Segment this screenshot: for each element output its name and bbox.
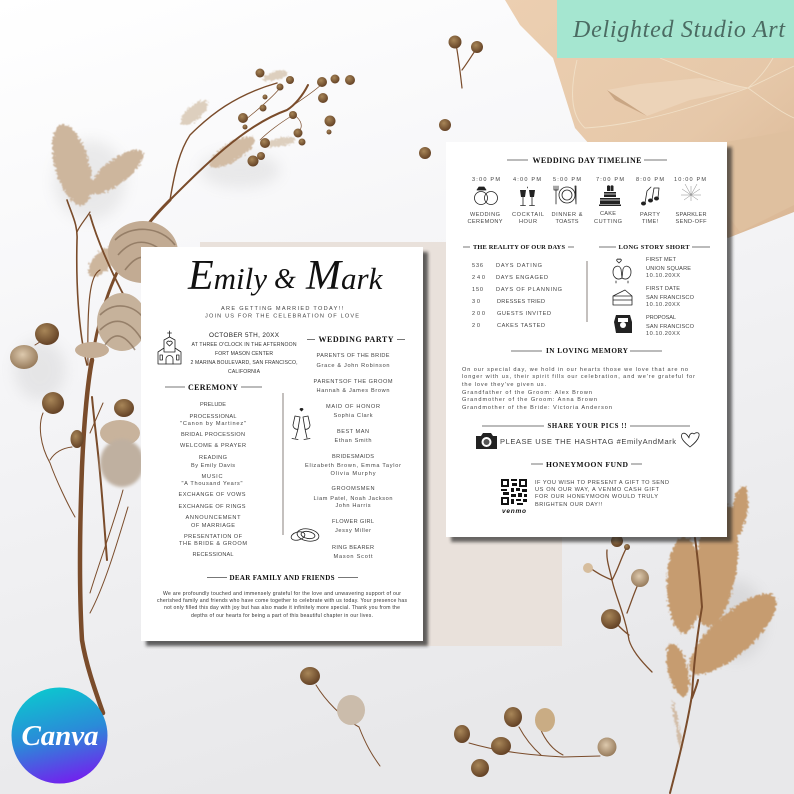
QR code with venmo label	[501, 479, 527, 515]
timeline labels: SEND-OFF	[676, 219, 707, 225]
timeline labels: CEREMONY	[468, 219, 503, 225]
honeymoon text: BRIGHTEN OUR DAY!!	[535, 502, 602, 508]
timeline labels: CAKE	[600, 211, 616, 217]
stats list: 536	[472, 263, 483, 269]
pinecones	[75, 221, 178, 358]
heading: the reality of our days: THE REALITY OF OUR DAYS	[473, 244, 565, 251]
icon: love birds	[613, 259, 631, 283]
banner: studio name: Delighted Studio Art	[572, 17, 786, 43]
QR code with venmo label: venmo	[502, 508, 526, 515]
honeymoon text: US ON OUR WAY, A VENMO CASH GIFT	[535, 487, 660, 493]
event details: AT THREE O'CLOCK IN THE AFTERNOON	[192, 342, 297, 348]
title: couple names: &	[274, 264, 296, 295]
icon: wedding rings	[290, 527, 320, 543]
dried plant: top left stems and plumes	[14, 69, 322, 713]
wedding party list: PARENTSOF THE GROOM	[314, 379, 393, 385]
bud twig, bottom centre	[300, 667, 380, 766]
event details: CALIFORNIA	[228, 369, 261, 375]
heading: long story short: LONG STORY SHORT	[618, 244, 690, 251]
ceremony order list: By Emily Davis	[191, 463, 235, 469]
ceremony order list: WELCOME & PRAYER	[180, 443, 246, 449]
card shadow: left	[146, 252, 428, 646]
timeline times	[472, 177, 706, 183]
honeymoon text	[535, 480, 669, 508]
closing message: not only filled this day with joy but has also made it infinitely more special. Thank you from the	[164, 605, 400, 611]
closing message: depths of our hearts for being a part of this beautiful chapter in our lives.	[191, 613, 373, 619]
icon: camera	[476, 433, 497, 449]
event details: OCTOBER 5TH, 20XX	[209, 332, 280, 339]
ceremony order list: "Canon by Martinez"	[180, 421, 246, 427]
beige backing paper	[200, 242, 562, 646]
heading: ceremony	[165, 383, 262, 392]
ceremony order list: EXCHANGE OF RINGS	[178, 504, 246, 510]
timeline times: 8:00 PM	[636, 177, 664, 183]
icon: hearts	[681, 433, 699, 447]
title: couple names	[187, 253, 384, 299]
timeline labels: HOUR	[519, 219, 537, 225]
ceremony order list: MUSIC	[202, 474, 222, 480]
timeline labels: WEDDING	[470, 212, 500, 218]
wedding party list: Hannah & James Brown	[316, 388, 390, 394]
icon: champagne flutes	[292, 408, 310, 440]
wedding party list: GROOMSMEN	[332, 486, 374, 492]
heading: dear family and friends: DEAR FAMILY AND FRIENDS	[230, 574, 335, 582]
stats list: 240	[472, 275, 485, 281]
icon: wedding cake	[599, 185, 621, 206]
banner: studio name	[557, 0, 794, 58]
invitation line: JOIN US FOR THE CELEBRATION OF LOVE	[205, 314, 359, 320]
wedding party list: RING BEARER	[332, 545, 374, 551]
stats list: 150	[472, 287, 483, 293]
berry twig, bottom right	[454, 707, 616, 777]
stats list: CAKES TASTED	[497, 323, 545, 329]
timeline times: 5:00 PM	[553, 177, 581, 183]
event details: FORT MASON CENTER	[215, 351, 273, 357]
story milestones	[646, 257, 695, 337]
badge: Canva logo	[12, 688, 108, 784]
icon: sparkler	[681, 184, 701, 201]
wedding party list: Elizabeth Brown, Emma Taylor	[305, 463, 401, 469]
timeline times: 3:00 PM	[472, 177, 500, 183]
memorial text: On our special day, we hold in our hearts those we love that are no	[462, 367, 688, 373]
wedding party list: Mason Scott	[334, 554, 373, 560]
honeymoon text: IF YOU WISH TO PRESENT A GIFT TO SEND	[535, 480, 669, 486]
ceremony order list: PRELUDE	[200, 402, 226, 408]
wedding party list: Ethan Smith	[334, 438, 372, 444]
closing message	[157, 591, 407, 619]
icon: dinner plate	[554, 186, 576, 204]
timeline labels: DINNER &	[552, 212, 583, 218]
timeline times: 4:00 PM	[513, 177, 541, 183]
icon: cocktail glasses	[520, 187, 535, 206]
memorial text: longer with us, their spirit fills our celebration, and we're grateful for	[462, 374, 695, 380]
icon: music notes	[641, 187, 659, 206]
memorial text: Grandfather of the Groom: Alex Brown	[462, 390, 592, 396]
ceremony order list: PRESENTATION OF	[184, 534, 243, 540]
wedding party list: MAID OF HONOR	[326, 404, 380, 410]
invitation line: ARE GETTING MARRIED TODAY!!	[221, 306, 343, 312]
kraft envelope with twine	[505, 0, 794, 238]
ceremony order list: THE BRIDE & GROOM	[179, 541, 247, 547]
icon: ring box	[614, 315, 632, 333]
heading: long story short	[599, 244, 710, 251]
stats list: 200	[472, 311, 485, 317]
dried plant: right plumes	[662, 485, 788, 793]
memorial text: the love they've given us.	[462, 382, 546, 388]
ceremony order list: OF MARRIAGE	[191, 523, 235, 529]
event details: 2 MARINA BOULEVARD, SAN FRANCISCO,	[190, 360, 298, 366]
wedding party list: Sophia Clark	[334, 413, 373, 419]
story milestones: SAN FRANCISCO	[646, 324, 695, 330]
timeline times: 10:00 PM	[674, 177, 706, 183]
divider: right card	[586, 261, 588, 322]
closing message: We are profoundly touched and immensely grateful for the love and unwavering support of our	[163, 591, 401, 597]
wedding party list: Grace & John Robinson	[316, 363, 390, 369]
ceremony order list: EXCHANGE OF VOWS	[178, 492, 246, 498]
timeline labels: COCKTAIL	[512, 212, 544, 218]
wedding party list: Olivia Murphy	[330, 471, 376, 477]
wedding party list: Jessy Miller	[335, 528, 371, 534]
ceremony order list: READING	[199, 455, 227, 461]
wedding party list: John Harris	[336, 503, 371, 509]
story milestones: 10.10.20XX	[646, 273, 680, 279]
memorial text: Grandmother of the Bride: Victoria Anderson	[462, 405, 612, 411]
timeline labels: TIME!	[642, 219, 658, 225]
panel: left card, wedding program	[141, 247, 423, 641]
wedding party list: Liam Patel, Noah Jackson	[314, 496, 392, 502]
icon: engagement rings	[474, 187, 498, 204]
heading: honeymoon fund: HONEYMOON FUND	[546, 460, 629, 469]
stats list: DAYS ENGAGED	[496, 275, 548, 281]
heading: share your pics: SHARE YOUR PICS !!	[548, 423, 626, 430]
wedding party list: PARENTS OF THE BRIDE	[316, 353, 390, 359]
wedding party list: FLOWER GIRL	[332, 519, 374, 525]
twig with berries top centre	[419, 36, 483, 159]
wedding party list	[305, 353, 401, 560]
story milestones: SAN FRANCISCO	[646, 295, 695, 301]
heading: in loving memory: IN LOVING MEMORY	[546, 347, 629, 355]
panel: right card, day details	[446, 142, 727, 537]
heading: wedding party: WEDDING PARTY	[318, 335, 394, 344]
stats list	[472, 263, 562, 329]
stats list: 20	[472, 323, 480, 329]
ceremony order list: RECESSIONAL	[192, 552, 234, 558]
badge: Canva logo: Canva	[22, 720, 98, 752]
timeline labels: CUTTING	[594, 219, 622, 225]
title: couple names: Emily	[187, 253, 267, 299]
heading: wedding day timeline: WEDDING DAY TIMELINE	[532, 156, 642, 165]
stats list: DAYS DATING	[496, 263, 542, 269]
timeline labels: TOASTS	[556, 219, 579, 225]
heading: ceremony: CEREMONY	[188, 383, 238, 392]
event details	[190, 332, 298, 375]
divider: left card	[282, 393, 284, 535]
timeline labels	[468, 211, 707, 225]
timeline labels: PARTY	[640, 212, 660, 218]
story milestones: UNION SQUARE	[646, 266, 691, 272]
berries on left plant	[10, 68, 355, 487]
story milestones: PROPOSAL	[646, 315, 676, 321]
wedding party list: BEST MAN	[337, 429, 369, 435]
memorial text	[462, 367, 695, 411]
timeline times: 7:00 PM	[596, 177, 624, 183]
story milestones: FIRST DATE	[646, 286, 680, 292]
ceremony order list: "A Thousand Years"	[182, 481, 242, 487]
timeline labels: SPARKLER	[676, 212, 706, 218]
stats list: GUESTS INVITED	[497, 311, 551, 317]
memorial text: Grandmother of the Groom: Anna Brown	[462, 397, 597, 403]
title: couple names: Mark	[305, 253, 384, 299]
story milestones: 10.10.20XX	[646, 331, 680, 337]
wedding party list: BRIDESMAIDS	[332, 454, 374, 460]
story milestones: 10.10.20XX	[646, 302, 680, 308]
ceremony order list: ANNOUNCEMENT	[186, 515, 241, 521]
hashtag text: PLEASE USE THE HASHTAG #EmilyAndMark	[500, 437, 676, 446]
closing message: cherished family and friends who have come together to celebrate with us today. Your presence has	[157, 598, 407, 604]
ceremony order list: PROCESSIONAL	[190, 414, 236, 420]
ceremony order list: BRIDAL PROCESSION	[181, 432, 245, 438]
card shadow: right	[451, 147, 732, 542]
small twig with berries, lower right	[583, 535, 652, 672]
stats list: DRESSES TRIED	[497, 299, 545, 305]
icon: slice of cake	[613, 290, 632, 305]
ceremony order list	[178, 402, 247, 558]
icon: church	[158, 331, 181, 364]
invitation line	[205, 306, 359, 320]
story milestones: FIRST MET	[646, 257, 677, 263]
honeymoon text: FOR OUR HONEYMOON WOULD TRULY	[535, 494, 658, 500]
stats list: 30	[472, 299, 480, 305]
stats list: DAYS OF PLANNING	[496, 287, 562, 293]
